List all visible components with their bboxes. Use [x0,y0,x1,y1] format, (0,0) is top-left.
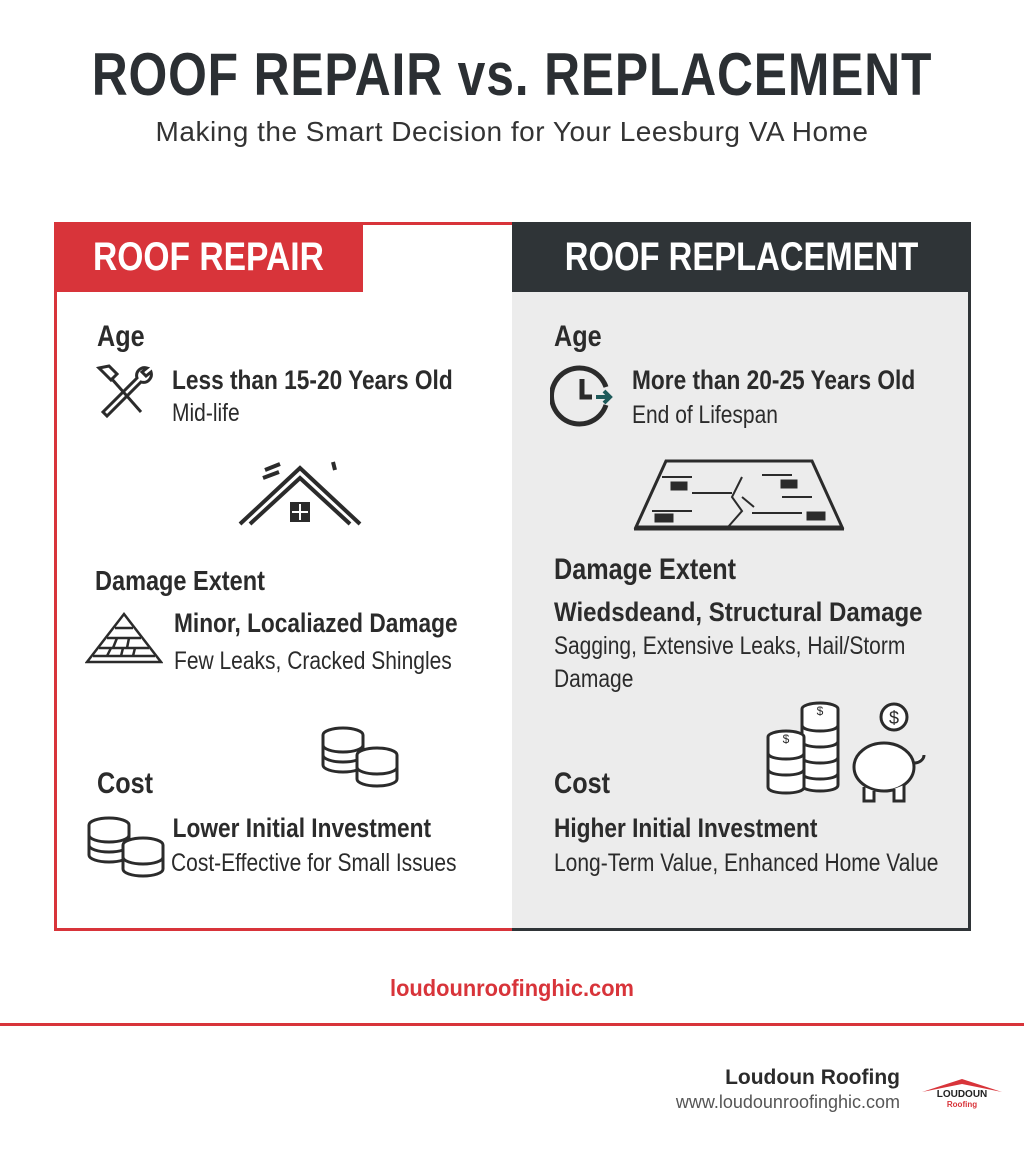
footer brand: www.loudounroofinghic.com [676,1092,900,1112]
title: ROOF REPAIR vs. REPLACEMENT [92,41,932,108]
panel: roof replacement [512,222,971,931]
text: cost replacement: Long-Term Value, Enhanced Home Value [554,849,938,877]
heading: roof repair [54,222,363,292]
text: cost repair [171,813,457,877]
footer brand: Loudoun Roofing [725,1066,900,1089]
text: damage repair: Few Leaks, Cracked Shingles [174,647,452,675]
text: age label: Age [554,320,602,353]
website link: loudounroofinghic.com [390,975,634,1001]
icon: coins and piggy bank: $ [817,704,824,718]
footer brand [676,1066,900,1112]
heading: roof replacement: ROOF REPLACEMENT [565,235,918,279]
text: age replacement: End of Lifespan [632,401,778,429]
icon: coins and piggy bank: $ [783,732,790,746]
icon: coins and piggy bank [766,702,926,802]
text: cost repair: Cost-Effective for Small Issues [171,849,457,877]
text: damage repair: Minor, Localiazed Damage [174,608,458,638]
text: damage label: Damage Extent [554,553,736,586]
subtitle: Making the Smart Decision for Your Leesburg VA Home [156,116,868,147]
text: damage replacement [554,597,923,693]
icon: coins and piggy bank: $ [889,708,899,728]
icon: clock [550,366,613,426]
text: damage repair [174,608,458,675]
text: cost label: Cost [97,767,153,800]
logo: LOUDOUN [937,1089,987,1100]
text: cost repair: Lower Initial Investment [173,813,431,843]
text: cost replacement [554,813,938,877]
logo [922,1079,1002,1109]
icon: damaged roof [634,460,844,530]
text: damage replacement: Sagging, Extensive Leaks, Hail/Storm Damage [554,632,905,693]
divider line [0,1023,1024,1026]
icon: tools [96,364,153,418]
icon: coins top [322,726,398,788]
icon: coins [88,816,164,878]
text: age replacement: More than 20-25 Years Old [632,365,915,395]
logo: Roofing [947,1100,977,1109]
text: age replacement [632,365,915,429]
text: damage replacement: Wiedsdeand, Structural Damage [554,597,923,627]
heading: roof replacement [512,222,971,292]
icon: house roof [238,462,362,526]
text: damage label: Damage Extent [95,565,265,596]
text: age repair: Less than 15-20 Years Old [172,365,453,395]
icon: shingles [85,612,163,664]
heading: roof repair: ROOF REPAIR [93,235,324,279]
text: age repair [172,365,453,427]
text: cost label: Cost [554,767,610,800]
panel: roof repair [54,222,514,931]
text: age label: Age [97,320,145,353]
text: age repair: Mid-life [172,399,240,427]
text: cost replacement: Higher Initial Investment [554,813,817,843]
